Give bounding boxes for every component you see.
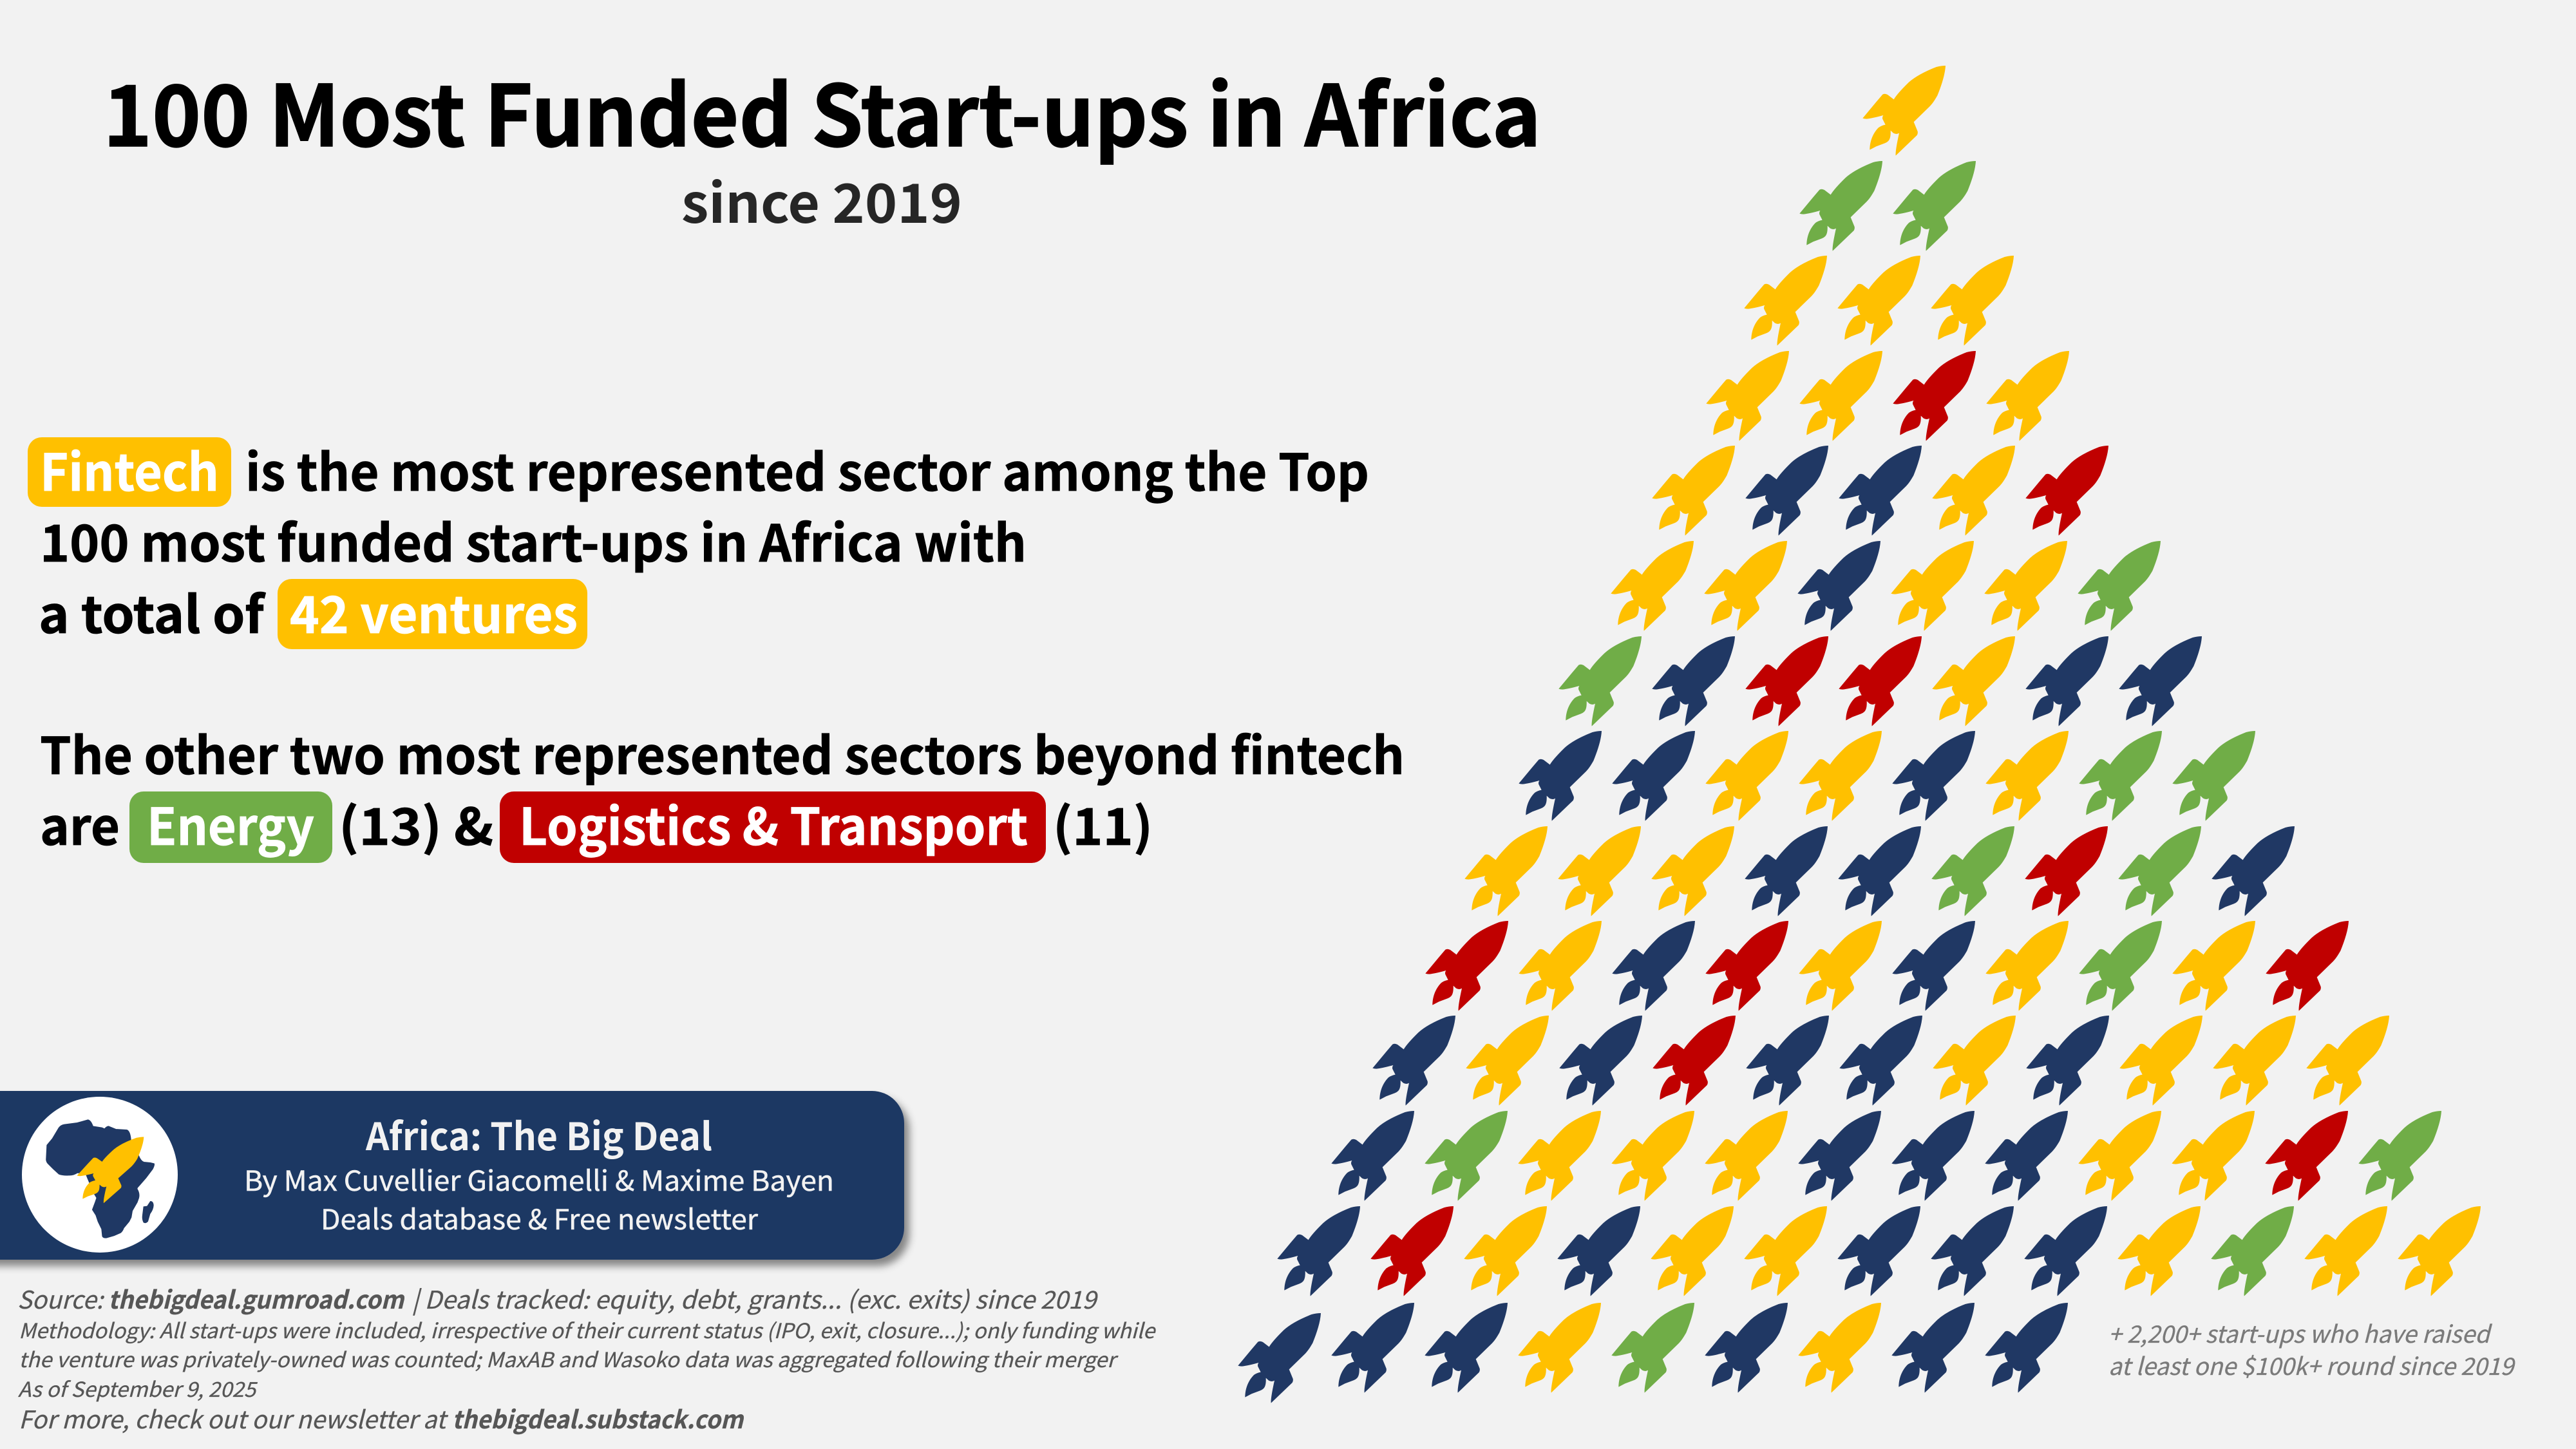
banner heading: Africa: The Big Deal (365, 1106, 712, 1161)
rocket row 10 (1425, 921, 2349, 1011)
source notes: thebigdeal.gumroad.com (108, 1280, 405, 1316)
banner authors: By Max Cuvellier Giacomelli & Maxime Bayen (244, 1159, 834, 1199)
rocket row 3 (1744, 256, 2014, 346)
rocket row 14 (1238, 1303, 2068, 1403)
rocket row 12 (1331, 1111, 2441, 1201)
source notes: the venture was privately-owned was counted; MaxAB and Wasoko data was aggregated following their merger (19, 1344, 1119, 1374)
rocket row 9 (1464, 826, 2295, 916)
text block: fintech statement (28, 431, 1369, 649)
source notes (17, 1280, 1157, 1435)
text block: other sectors statement: are (40, 786, 120, 860)
text block: fintech statement: is the most represented sector among the Top (245, 431, 1369, 506)
title: 100 Most Funded Start-ups in Africa (103, 48, 1541, 171)
chart: pyramid of 100 rockets coloured by sector (1238, 66, 2481, 1403)
source notes: Methodology: All start-ups were included, irrespective of their current status (IPO, exit, closure...); only funding while (19, 1315, 1157, 1345)
source notes: | Deals tracked: equity, debt, grants... (exc. exits) since 2019 (412, 1280, 1099, 1316)
text block: other sectors statement: (11) (1053, 786, 1153, 860)
rocket row 2 (1799, 161, 1976, 251)
rocket row 4 (1706, 351, 2069, 441)
note: 2,200+ start-ups: at least one $100k+ round since 2019 (2108, 1347, 2516, 1382)
highlight: Fintech: Fintech (40, 431, 219, 506)
note: 2,200+ start-ups (2108, 1315, 2516, 1382)
text block: other sectors statement: (13) & (339, 786, 493, 860)
banner tagline: Deals database & Free newsletter (321, 1198, 758, 1238)
rocket row 13 (1277, 1206, 2481, 1296)
rocket row 8 (1519, 731, 2255, 821)
rocket row 1 (1862, 66, 1946, 156)
highlight: 42 ventures: 42 ventures (290, 574, 578, 648)
highlight: Energy: Energy (147, 786, 314, 860)
highlight: Logistics & Transport: Logistics & Transport (519, 786, 1028, 860)
text block: other sectors statement (40, 715, 1405, 863)
rocket row 11 (1372, 1016, 2389, 1106)
source notes: Source: (17, 1280, 104, 1316)
text block: fintech statement: 100 most funded start-ups in Africa with (40, 502, 1027, 576)
rocket row 5 (1652, 446, 2108, 536)
rocket row 7 (1558, 636, 2202, 726)
panel: Africa The Big Deal banner (0, 1091, 904, 1260)
source notes: As of September 9, 2025 (18, 1374, 258, 1403)
rocket row 6 (1611, 541, 2161, 631)
text block: other sectors statement: The other two most represented sectors beyond fintech (40, 715, 1405, 789)
text block: fintech statement: a total of (39, 574, 266, 648)
icon: Africa logo with rocket (22, 1097, 178, 1253)
note: 2,200+ start-ups: + 2,200+ start-ups who have raised (2108, 1315, 2492, 1350)
subtitle: since 2019 (681, 161, 962, 239)
source notes: For more, check out our newsletter at (19, 1400, 449, 1435)
source notes: thebigdeal.substack.com (452, 1400, 744, 1435)
